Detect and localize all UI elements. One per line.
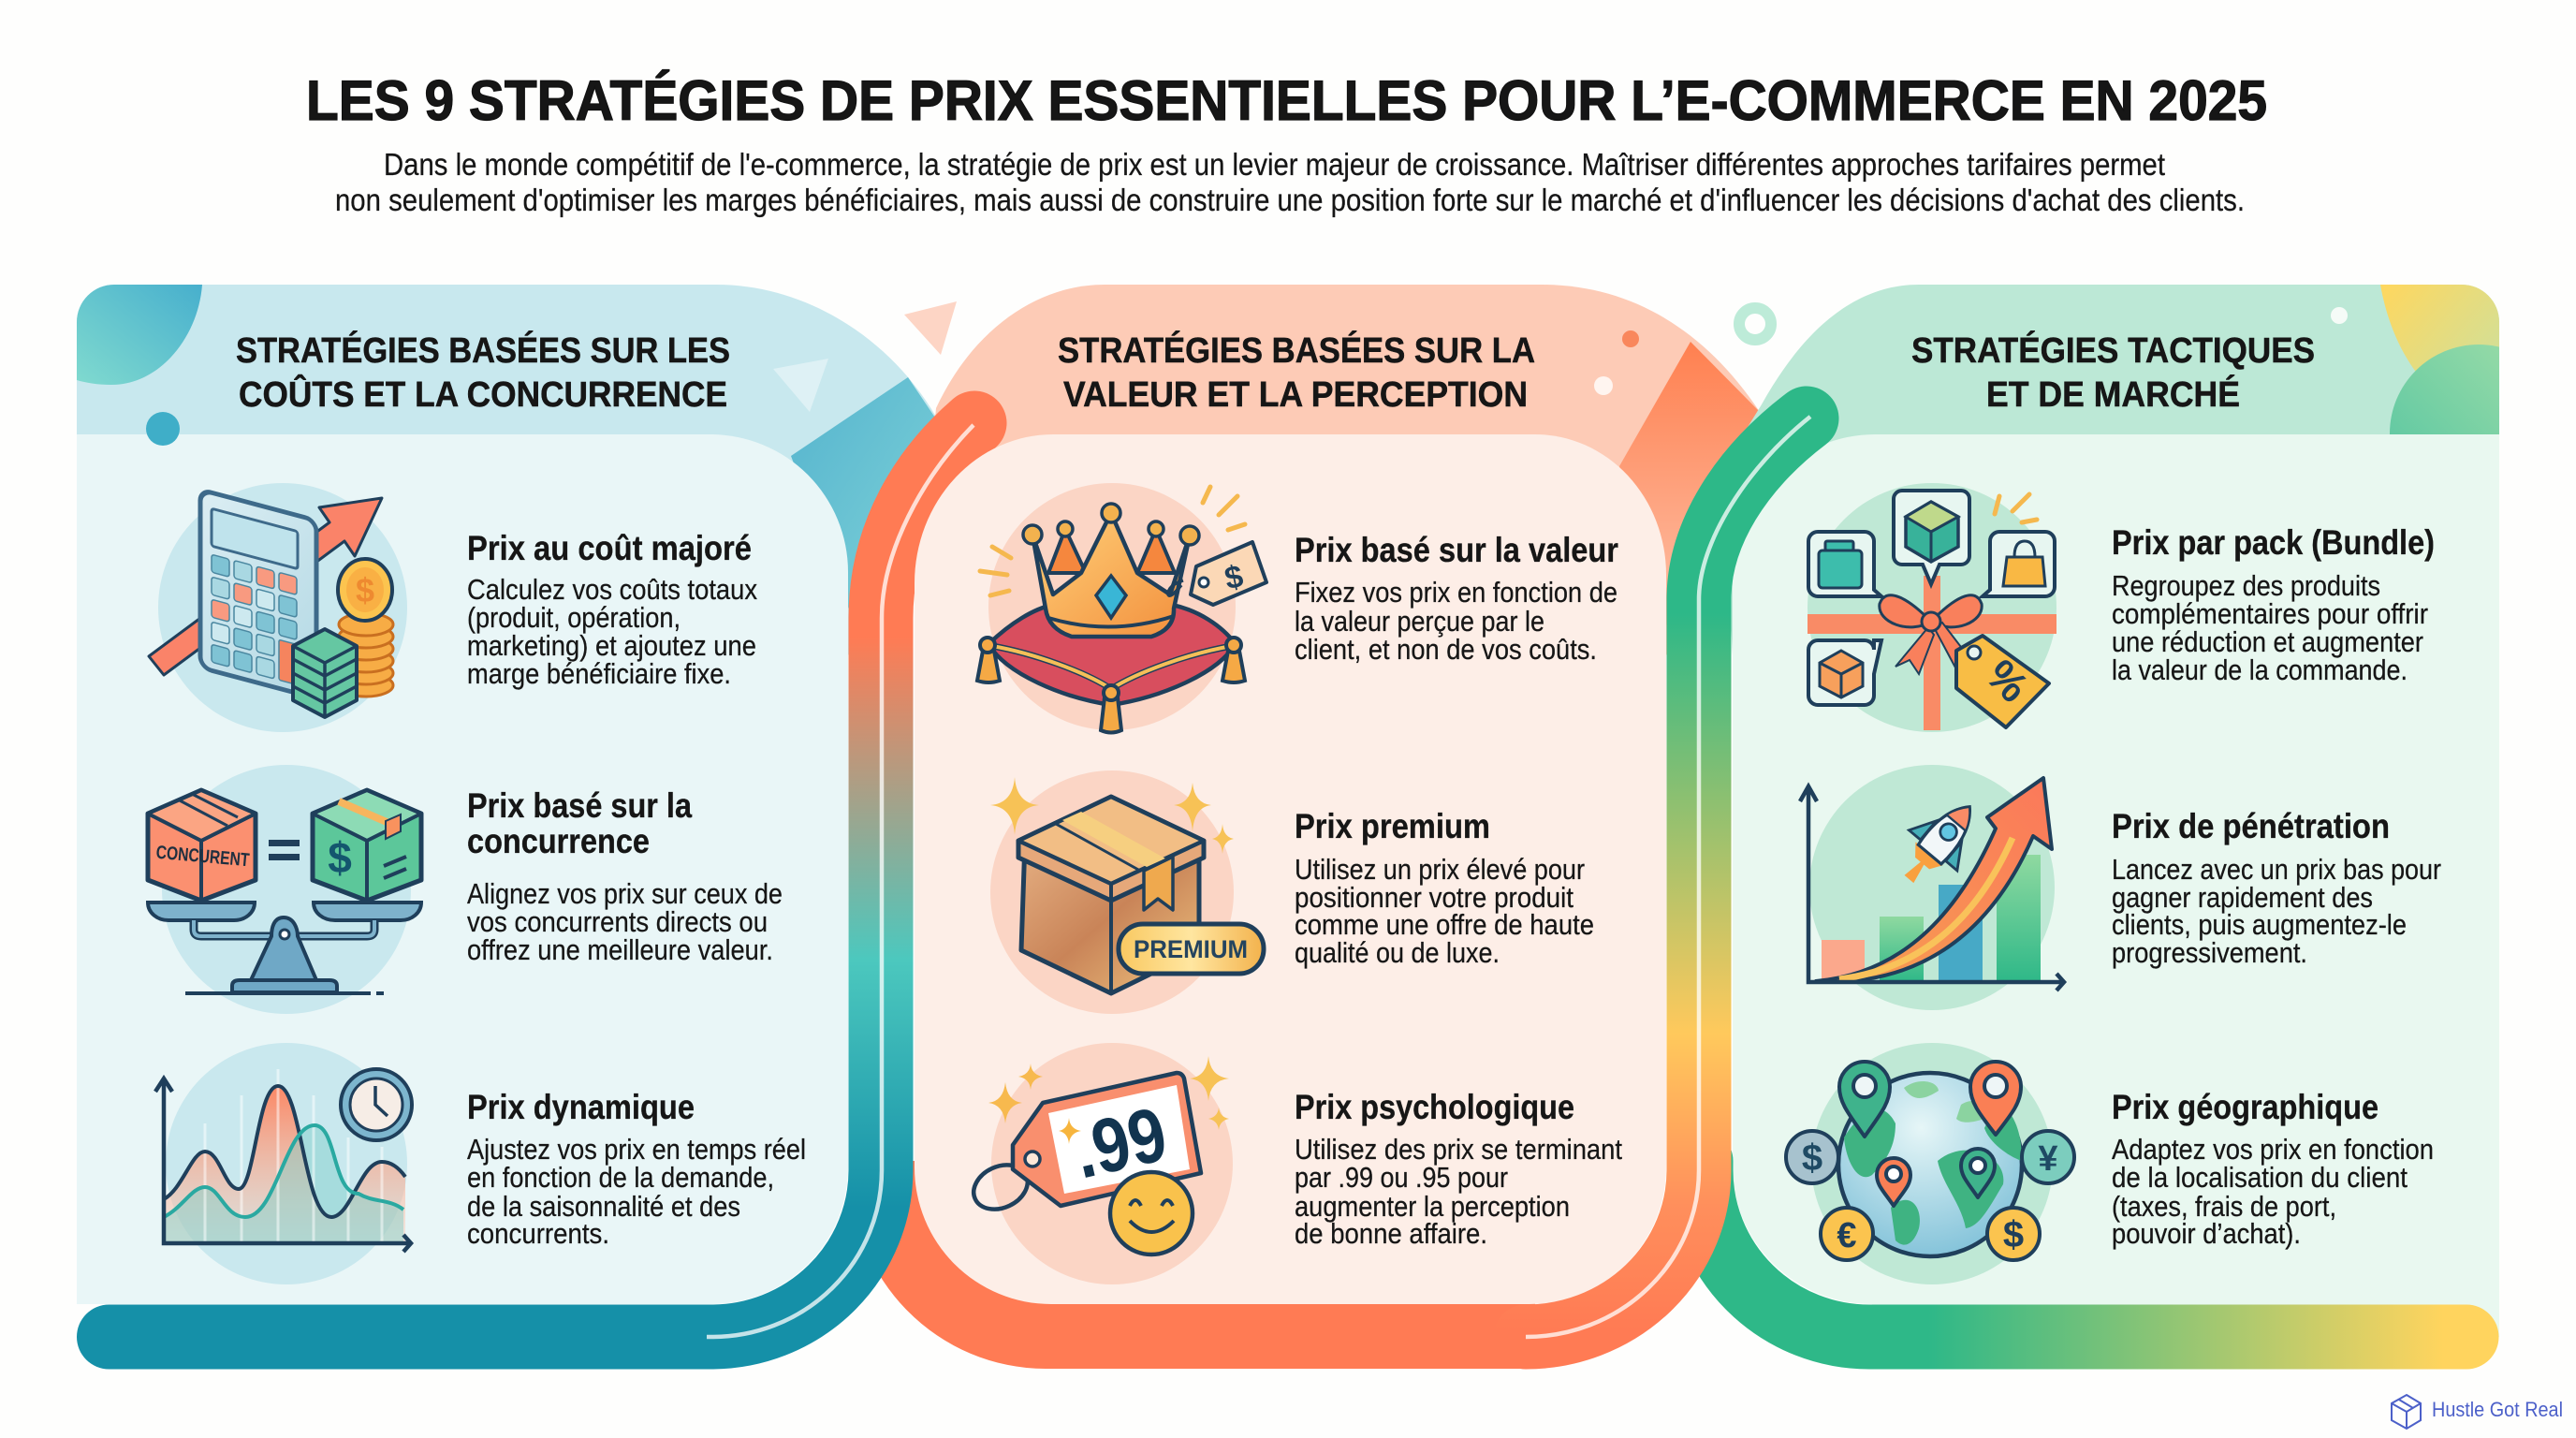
item text: bundle pricing: une réduction et augmenter (2112, 625, 2423, 658)
item text: value based pricing: Prix basé sur la valeur (1295, 531, 1618, 569)
item text: value based pricing: Fixez vos prix en fonction de (1295, 576, 1617, 609)
middle panel bottom band (850, 1161, 1535, 1369)
left header decoration: teal wedge (791, 377, 939, 609)
right panel header background (1722, 285, 2499, 655)
item text: dynamic pricing: en fonction de la demande, (467, 1161, 774, 1194)
icon: growth chart with rocket (1800, 765, 2064, 1010)
panel: left, costs and competition (77, 285, 939, 1304)
middle panel heading (1058, 330, 1535, 415)
watermark (2392, 1395, 2563, 1429)
item text: dynamic pricing: de la saisonnalité et des (467, 1190, 740, 1223)
item text: cost-plus pricing (467, 529, 757, 690)
item text: dynamic pricing: Prix dynamique (467, 1088, 695, 1126)
middle header decoration: triangle (904, 301, 957, 355)
item text: cost-plus pricing: marketing) et ajoutez une (467, 629, 756, 662)
icon: .99 price tag with smiley (967, 1043, 1233, 1284)
intro text: non seulement d'optimiser les marges bénéficiaires, mais aussi de construire une position forte sur le marché et d'influencer les décisions d'achat des clients. (335, 183, 2245, 217)
item text: geographic pricing: Prix géographique (2112, 1088, 2378, 1126)
icon: globe with pins and currencies: $ (1802, 1137, 1822, 1179)
icon: dynamic chart with clock (155, 1043, 412, 1284)
item text: bundle pricing: la valeur de la commande. (2112, 653, 2408, 686)
item text: bundle pricing (2112, 523, 2435, 686)
item text: psychological pricing: par .99 ou .95 pour (1295, 1161, 1508, 1194)
item text: geographic pricing: pouvoir d’achat). (2112, 1217, 2301, 1250)
item text: competitor pricing: Prix basé sur la (467, 786, 692, 825)
ribbon highlight (1526, 417, 1810, 1337)
right panel heading: STRATÉGIES TACTIQUES (1911, 330, 2315, 371)
item text: bundle pricing: complémentaires pour offrir (2112, 597, 2428, 630)
left header decoration: dot (146, 412, 180, 446)
intro text (335, 147, 2245, 217)
item text: premium pricing (1295, 807, 1594, 969)
item text: value based pricing: la valeur perçue par le (1295, 605, 1544, 638)
icon: balance scale with boxes (148, 765, 421, 1014)
icon: .99 price tag with smiley: .99 (1066, 1092, 1175, 1196)
icon: calculator with arrow and coins (149, 483, 407, 732)
title: LES 9 STRATÉGIES DE PRIX ESSENTIELLES POUR L’E-COMMERCE EN 2025 (306, 69, 2267, 132)
right panel heading: ET DE MARCHÉ (1986, 374, 2240, 415)
icon: balance scale with boxes: $ (328, 833, 352, 882)
middle panel heading: STRATÉGIES BASÉES SUR LA (1058, 330, 1535, 371)
item text: dynamic pricing: Ajustez vos prix en temps réel (467, 1133, 806, 1166)
right panel body (1733, 434, 2499, 1337)
item text: cost-plus pricing: (produit, opération, (467, 601, 681, 634)
item text: competitor pricing: Alignez vos prix sur ceux de (467, 877, 783, 910)
item text: premium pricing: Prix premium (1295, 807, 1490, 845)
icon: premium box with sparkles (990, 770, 1264, 1014)
icon: bundled gifts with ribbon and tag (1808, 483, 2056, 732)
left panel heading (236, 330, 730, 415)
item text: competitor pricing: vos concurrents directs ou (467, 905, 768, 938)
right header decoration: yellow corner (2380, 285, 2499, 421)
left header decoration: triangle (773, 359, 828, 412)
item text: premium pricing: Utilisez un prix élevé pour (1295, 853, 1585, 886)
middle header decoration: white dot (1594, 376, 1613, 395)
item text: psychological pricing (1295, 1088, 1622, 1250)
icon: crown on a cushion with price tag (977, 483, 1266, 732)
item text: geographic pricing (2112, 1088, 2434, 1250)
left header decoration: blob (77, 285, 202, 385)
panel: right, tactics and market (1526, 285, 2568, 1337)
item text: cost-plus pricing: marge bénéficiaire fixe. (467, 657, 731, 690)
item text: bundle pricing: Prix par pack (Bundle) (2112, 523, 2435, 562)
item text: premium pricing: qualité ou de luxe. (1295, 936, 1500, 969)
item text: penetration pricing: Lancez avec un prix bas pour (2112, 853, 2441, 886)
item text: psychological pricing: augmenter la perception (1295, 1190, 1570, 1223)
icon: balance scale with boxes: CONCURENT (155, 843, 250, 871)
item text: cost-plus pricing: Calculez vos coûts totaux (467, 573, 757, 606)
right panel heading (1911, 330, 2315, 415)
item text: competitor pricing: concurrence (467, 822, 650, 860)
left panel heading: STRATÉGIES BASÉES SUR LES (236, 330, 730, 371)
item text: cost-plus pricing: Prix au coût majoré (467, 529, 752, 567)
item text: penetration pricing: progressivement. (2112, 936, 2307, 969)
icon: globe with pins and currencies: € (1837, 1216, 1857, 1255)
middle panel heading: VALEUR ET LA PERCEPTION (1063, 375, 1528, 415)
item text: penetration pricing: Prix de pénétration (2112, 807, 2390, 845)
item text: geographic pricing: (taxes, frais de port, (2112, 1190, 2336, 1223)
icon: calculator with arrow and coins: $ (356, 571, 374, 609)
panel: middle, value and perception (109, 285, 1769, 1369)
item text: competitor pricing (467, 786, 783, 966)
intro text: Dans le monde compétitif de l'e-commerce, la stratégie de prix est un levier majeur de croissance. Maîtriser différentes approches tarifaires permet (384, 147, 2165, 182)
item text: psychological pricing: de bonne affaire. (1295, 1217, 1487, 1250)
icon: cube logo (2392, 1395, 2421, 1429)
icon: bundled gifts with ribbon and tag: % (1977, 650, 2039, 712)
ribbon highlight (707, 425, 973, 1337)
middle panel body (915, 434, 1666, 1304)
item text: competitor pricing: offrez une meilleure valeur. (467, 933, 773, 966)
item text: dynamic pricing: concurrents. (467, 1217, 609, 1250)
item text: psychological pricing: Prix psychologique (1295, 1088, 1574, 1126)
middle header decoration: orange dot (1622, 330, 1639, 347)
item text: premium pricing: comme une offre de haute (1295, 908, 1594, 941)
icon: globe with pins and currencies: $ (2003, 1214, 2024, 1255)
item text: value based pricing: client, et non de vos coûts. (1295, 633, 1597, 666)
right header decoration: white dot (2331, 307, 2348, 324)
icon: premium box with sparkles: PREMIUM (1134, 935, 1248, 963)
middle panel header background (915, 285, 1760, 655)
item text: value based pricing (1295, 531, 1618, 666)
icon: globe with pins and currencies: ¥ (2038, 1139, 2058, 1179)
middle header decoration: orange wedge (1619, 342, 1769, 655)
watermark text: Hustle Got Real (2432, 1398, 2563, 1421)
item text: penetration pricing: clients, puis augmentez-le (2112, 908, 2407, 941)
left panel heading: COÛTS ET LA CONCURRENCE (239, 373, 727, 415)
item text: bundle pricing: Regroupez des produits (2112, 569, 2380, 602)
item text: premium pricing: positionner votre produit (1295, 881, 1573, 914)
left panel body (77, 434, 848, 1304)
item text: penetration pricing: gagner rapidement des (2112, 881, 2373, 914)
ribbon: green to orange (1526, 418, 1807, 1337)
item text: geographic pricing: de la localisation du client (2112, 1161, 2408, 1194)
item text: penetration pricing (2112, 807, 2441, 969)
item text: geographic pricing: Adaptez vos prix en fonction (2112, 1133, 2434, 1166)
ribbon: orange to teal (109, 423, 974, 1337)
right panel bottom band (1701, 1161, 2466, 1337)
icon: crown on a cushion with price tag: $ (1222, 558, 1246, 597)
left panel header background (77, 285, 936, 655)
item text: psychological pricing: Utilisez des prix se terminant (1295, 1133, 1622, 1166)
right header decoration: green circle (2390, 345, 2499, 434)
icon: globe with pins and currencies (1786, 1043, 2074, 1284)
right header decoration: ring (1739, 308, 1771, 340)
item text: dynamic pricing (467, 1088, 806, 1250)
